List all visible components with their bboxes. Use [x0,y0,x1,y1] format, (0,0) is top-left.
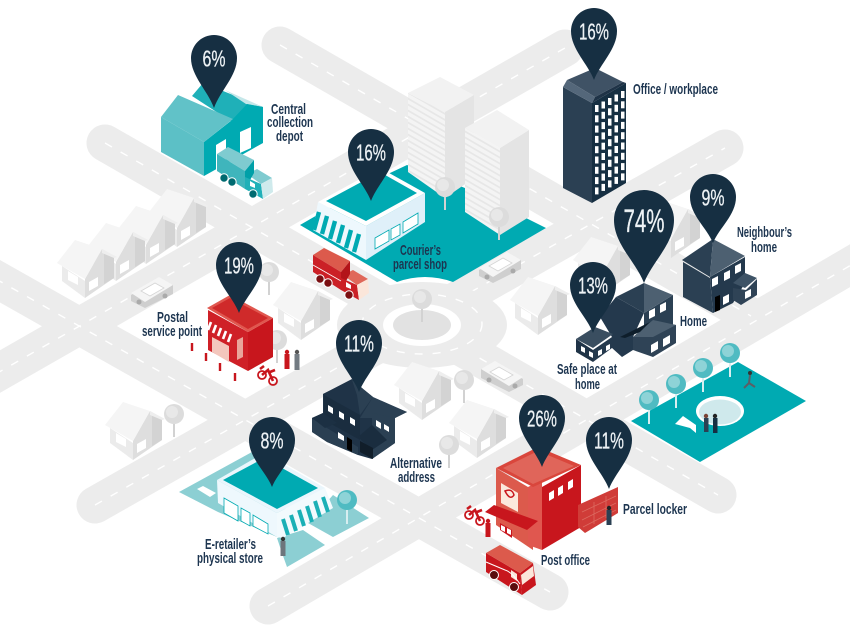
pin: 6% central collection depot [191,35,237,108]
label: alternative address [390,455,442,486]
label: e-retailer's physical store: physical store [197,550,263,567]
pin: 9% neighbour [690,174,736,243]
pin: 16% office [571,8,617,80]
label: office / workplace: Office / workplace [633,81,718,98]
pin: 13% safe place: 13% [578,272,608,298]
icon: teal truck [217,147,273,199]
building: courier's parcel shop [313,168,425,260]
building: office tower [563,68,626,203]
label: parcel locker: Parcel locker [623,501,687,518]
pin: 11% alternative address: 11% [344,330,374,356]
gray trees [164,262,474,468]
pin: 74% home [614,190,674,283]
label: post office: Post office [541,552,590,569]
label: e-retailer's physical store: E-retailer’s [205,536,256,553]
pin: 16% parcel shop: 16% [356,140,386,166]
building: post office [465,447,581,550]
building: safe place at home [576,327,613,362]
building: postal service point [192,295,277,385]
icon: red van [486,545,536,595]
pin: 11% parcel locker: 11% [594,428,624,454]
label: safe place at home: home [575,376,600,393]
label: alternative address: address [398,469,435,486]
label: home: Home [680,313,707,330]
label: neighbour's home: Neighbour’s [737,224,792,241]
pin: 74% home: 74% [624,203,664,239]
label: central collection depot: Central [271,101,306,118]
building: e-retailer's physical store [179,452,369,567]
pin: 8% e-retailer: 8% [260,428,284,454]
label: alternative address: Alternative [390,455,442,472]
pin: 26% post office [519,395,565,467]
pin: 9% neighbour: 9% [702,184,724,210]
parcel shop teal plaza [300,165,546,282]
pin: 11% alternative address [336,320,382,392]
label: central collection depot: depot [276,128,303,145]
label: neighbour's home [737,224,792,256]
pin: 6% central collection depot: 6% [202,46,226,72]
building: neighbour's home [682,239,757,313]
pin: 11% parcel locker [586,417,632,489]
pin: 13% safe place [570,262,616,333]
building: home [600,283,676,357]
building: alternative address house [312,379,407,459]
people at service point [284,350,300,370]
office towers [408,77,529,240]
label: courier's parcel shop: parcel shop [393,256,447,273]
pin: 19% postal service point: 19% [224,252,254,278]
parcel locker [578,487,618,533]
label: safe place at home [557,361,617,393]
panel: park [631,343,806,462]
pin: 8% e-retailer [249,417,295,487]
pin: 16% office: 16% [579,18,609,44]
label: courier's parcel shop [393,242,447,273]
gray background houses [57,189,703,460]
pin: 19% postal service point [216,242,262,313]
label: central collection depot: collection [267,114,313,131]
label: postal service point: service point [142,323,202,340]
label: postal service point [142,309,202,340]
gray cars [131,252,523,392]
label: e-retailer's physical store [197,536,263,567]
label: central collection depot [267,101,313,145]
pin: 26% post office: 26% [527,406,557,432]
icon: red truck [313,248,369,300]
pin: 16% parcel shop [348,129,394,201]
label: safe place at home: Safe place at [557,361,617,378]
label: postal service point: Postal [157,309,188,326]
label: neighbour's home: home [751,239,777,256]
roundabout [337,282,507,368]
building: central collection depot [161,83,263,176]
label: courier's parcel shop: Courier’s [400,242,441,259]
